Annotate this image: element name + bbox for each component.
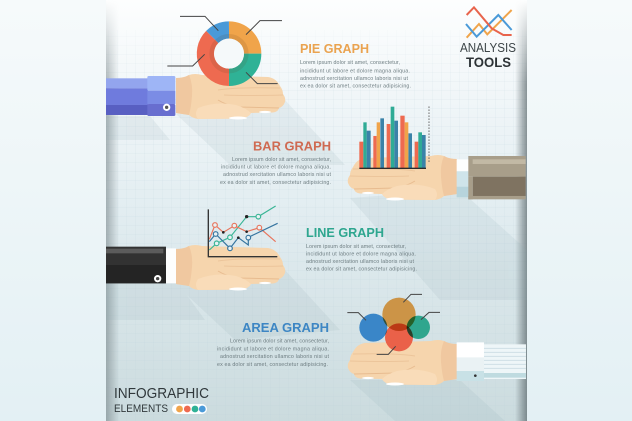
bar graph: chart bbox=[359, 107, 429, 169]
footer title: infographic elements: INFOGRAPHIC bbox=[114, 385, 209, 402]
text block: bar graph: incididunt ut labore et dolore magna aliqua. bbox=[221, 164, 331, 170]
logo: analysis tools bbox=[460, 7, 516, 70]
text block: line graph: Lorem ipsum dolor sit amet, consectetur, bbox=[306, 244, 406, 250]
text block: area graph: ex ea dolor sit amet, consectetur adipisicing. bbox=[217, 362, 328, 368]
heading: area graph: AREA GRAPH bbox=[242, 321, 329, 335]
text block: bar graph bbox=[220, 157, 332, 186]
text block: line graph bbox=[306, 244, 417, 272]
sleeve: white striped bbox=[457, 342, 526, 381]
center panel bbox=[106, 0, 527, 421]
text block: pie graph: incididunt ut labore et dolore magna aliqua. bbox=[300, 68, 410, 74]
logo: analysis tools: ANALYSIS bbox=[460, 40, 516, 55]
text block: bar graph: ex ea dolor sit amet, consectetur adipisicing. bbox=[220, 180, 331, 186]
sleeve: black bbox=[106, 247, 176, 283]
text block: line graph: ex ea dolor sit amet, consectetur adipisicing. bbox=[306, 266, 417, 272]
hand 1 with blue sleeve bbox=[106, 74, 285, 120]
footer title: infographic elements bbox=[114, 385, 209, 415]
pie graph: donut chart bbox=[167, 16, 282, 84]
hand shadows bbox=[106, 100, 527, 421]
footer title: infographic elements: ELEMENTS bbox=[114, 403, 168, 415]
text block: line graph: incididunt ut labore et dolore magna aliqua. bbox=[306, 252, 416, 258]
logo icon bbox=[466, 7, 512, 38]
hand 2 with taupe sleeve bbox=[348, 155, 526, 200]
text block: area graph: adnostrud xercitation ullamco laboris nisi ut bbox=[220, 354, 330, 360]
area graph: venn diagram bbox=[347, 294, 440, 354]
text block: area graph: Lorem ipsum dolor sit amet, consectetur, bbox=[230, 338, 329, 344]
sleeve: blue bbox=[106, 76, 175, 116]
text block: pie graph: ex ea dolor sit amet, consectetur adipisicing. bbox=[300, 84, 411, 90]
heading: bar graph: BAR GRAPH bbox=[253, 140, 331, 154]
sleeve: taupe bbox=[457, 156, 526, 199]
hand 4 with white sleeve bbox=[348, 340, 526, 386]
text block: pie graph bbox=[300, 60, 411, 90]
text block: line graph: adnostrud xercitation ullamco laboris nisi ut bbox=[306, 259, 415, 265]
heading: line graph: LINE GRAPH bbox=[306, 226, 384, 240]
text block: bar graph: Lorem ipsum dolor sit amet, consectetur, bbox=[232, 157, 331, 163]
text block: bar graph: adnostrud xercitation ullamco laboris nisi ut bbox=[223, 172, 332, 178]
text block: area graph: incididunt ut labore et dolore magna aliqua. bbox=[217, 346, 329, 352]
logo: analysis tools: TOOLS bbox=[466, 54, 511, 70]
leader lines bbox=[167, 16, 282, 84]
hand 3 with black sleeve bbox=[106, 245, 285, 290]
heading: pie graph: PIE GRAPH bbox=[300, 42, 369, 56]
line graph: chart bbox=[208, 206, 278, 257]
colored dots bbox=[172, 404, 207, 414]
text block: area graph bbox=[217, 338, 330, 368]
text block: pie graph: Lorem ipsum dolor sit amet, consectetur, bbox=[300, 60, 400, 66]
text block: pie graph: adnostrud xercitation ullamco laboris nisi ut bbox=[300, 76, 409, 82]
